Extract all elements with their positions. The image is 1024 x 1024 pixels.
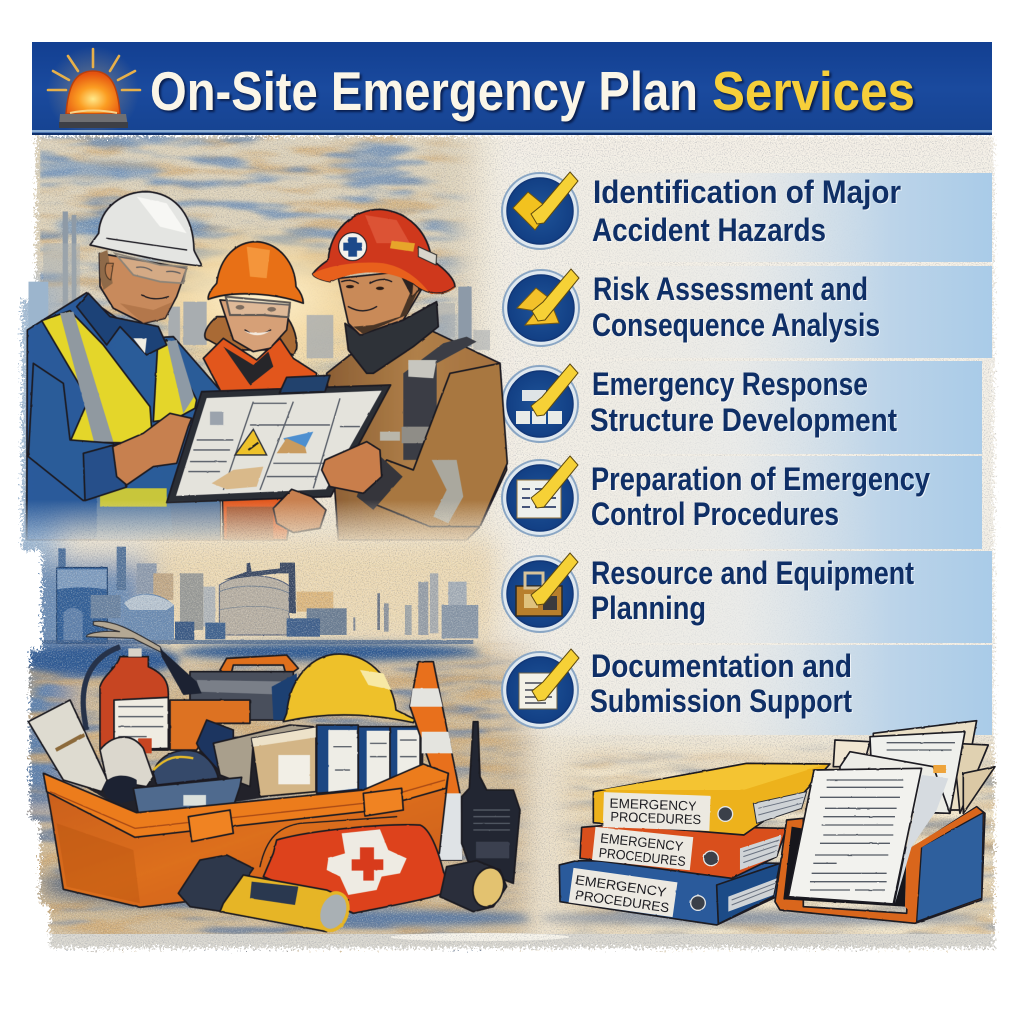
orange toolbox xyxy=(43,764,448,907)
item 5: equipment: Planning xyxy=(591,590,706,626)
item 2: risk assessment xyxy=(490,266,992,358)
firefighter and officer hands on plan xyxy=(273,442,382,533)
binder: orange xyxy=(580,825,787,878)
item 1: hazards: Accident Hazards xyxy=(592,212,826,248)
small flashlight xyxy=(440,861,508,912)
item 6: documentation: Submission Support xyxy=(590,683,852,719)
sleeve xyxy=(360,363,507,527)
document holder xyxy=(775,765,985,923)
yellow flashlight xyxy=(178,855,353,935)
rolled plans xyxy=(28,700,107,792)
illustration: three workers reading a site plan xyxy=(27,192,507,540)
worker: engineer xyxy=(27,192,220,540)
orange hard hat xyxy=(208,242,303,303)
forearm xyxy=(28,363,127,501)
item 6: documentation xyxy=(490,645,992,735)
white hard hat xyxy=(90,192,202,266)
binder: orange: PROCEDURES xyxy=(598,845,687,869)
red fire helmet xyxy=(313,209,455,293)
binder label: EMERGENCY xyxy=(600,830,684,854)
turnout collar xyxy=(345,302,438,373)
binders xyxy=(317,725,420,793)
illustration: emergency kit xyxy=(28,621,520,935)
title banner xyxy=(32,42,992,138)
item 1: hazards xyxy=(490,172,992,262)
item 5: equipment: Resource and Equipment xyxy=(591,555,914,591)
safety goggles xyxy=(226,297,290,317)
worker: safety officer xyxy=(203,242,317,540)
hand xyxy=(113,413,192,485)
binder: blue xyxy=(559,861,783,925)
binder: yellow xyxy=(593,763,830,835)
item 4: control procedures: Control Procedures xyxy=(591,496,839,532)
bandage roll xyxy=(100,737,153,787)
sky clouds xyxy=(38,135,470,382)
skyline behind workers xyxy=(28,212,490,370)
box handle xyxy=(220,655,298,678)
item 3: response structure: Structure Development xyxy=(590,402,897,438)
box interior xyxy=(50,725,423,817)
icon: emergency beacon xyxy=(47,46,140,138)
item 4: control procedures: Preparation of Emergency xyxy=(591,461,930,497)
worker: firefighter xyxy=(313,209,507,540)
title highlight: Services xyxy=(712,60,915,122)
gear in box xyxy=(170,700,250,750)
title text: On-Site Emergency Plan xyxy=(150,60,698,122)
clipboard with site plan xyxy=(167,375,391,503)
collar xyxy=(77,293,167,355)
head xyxy=(99,253,187,323)
back papers xyxy=(833,721,995,813)
binder label: EMERGENCY xyxy=(609,796,697,814)
item 3: response structure xyxy=(490,361,982,454)
item 4: control procedures xyxy=(490,456,982,549)
item 3: response structure: Emergency Response xyxy=(592,366,868,402)
item 1: hazards: Identification of Major xyxy=(593,174,901,210)
main document xyxy=(788,768,922,904)
traffic cone xyxy=(410,662,462,860)
binder label: EMERGENCY xyxy=(574,872,667,900)
helmet badge xyxy=(339,233,367,261)
refinery skyline xyxy=(40,547,478,644)
glasses xyxy=(115,253,187,283)
first aid kit xyxy=(260,817,447,913)
fire extinguisher xyxy=(83,621,202,753)
binder: blue: PROCEDURES xyxy=(574,887,670,915)
dark gear xyxy=(197,720,233,787)
item 2: risk assessment: Risk Assessment and xyxy=(593,271,868,307)
warning triangle xyxy=(235,429,267,455)
item 2: risk assessment: Consequence Analysis xyxy=(592,307,880,343)
item 5: equipment xyxy=(490,551,992,643)
yellow hard hat xyxy=(283,654,415,723)
goggles bowl xyxy=(153,750,218,785)
illustration: binders and document holder xyxy=(559,721,995,925)
face xyxy=(220,300,290,352)
face xyxy=(338,270,425,335)
item 6: documentation: Documentation and xyxy=(591,648,852,684)
ground streaks xyxy=(20,640,1020,965)
safety vest xyxy=(42,311,153,443)
panel: service list xyxy=(490,172,992,735)
radio xyxy=(462,722,520,883)
small tray xyxy=(133,777,242,814)
binder: yellow: PROCEDURES xyxy=(610,809,701,827)
books and boxes xyxy=(213,725,313,787)
